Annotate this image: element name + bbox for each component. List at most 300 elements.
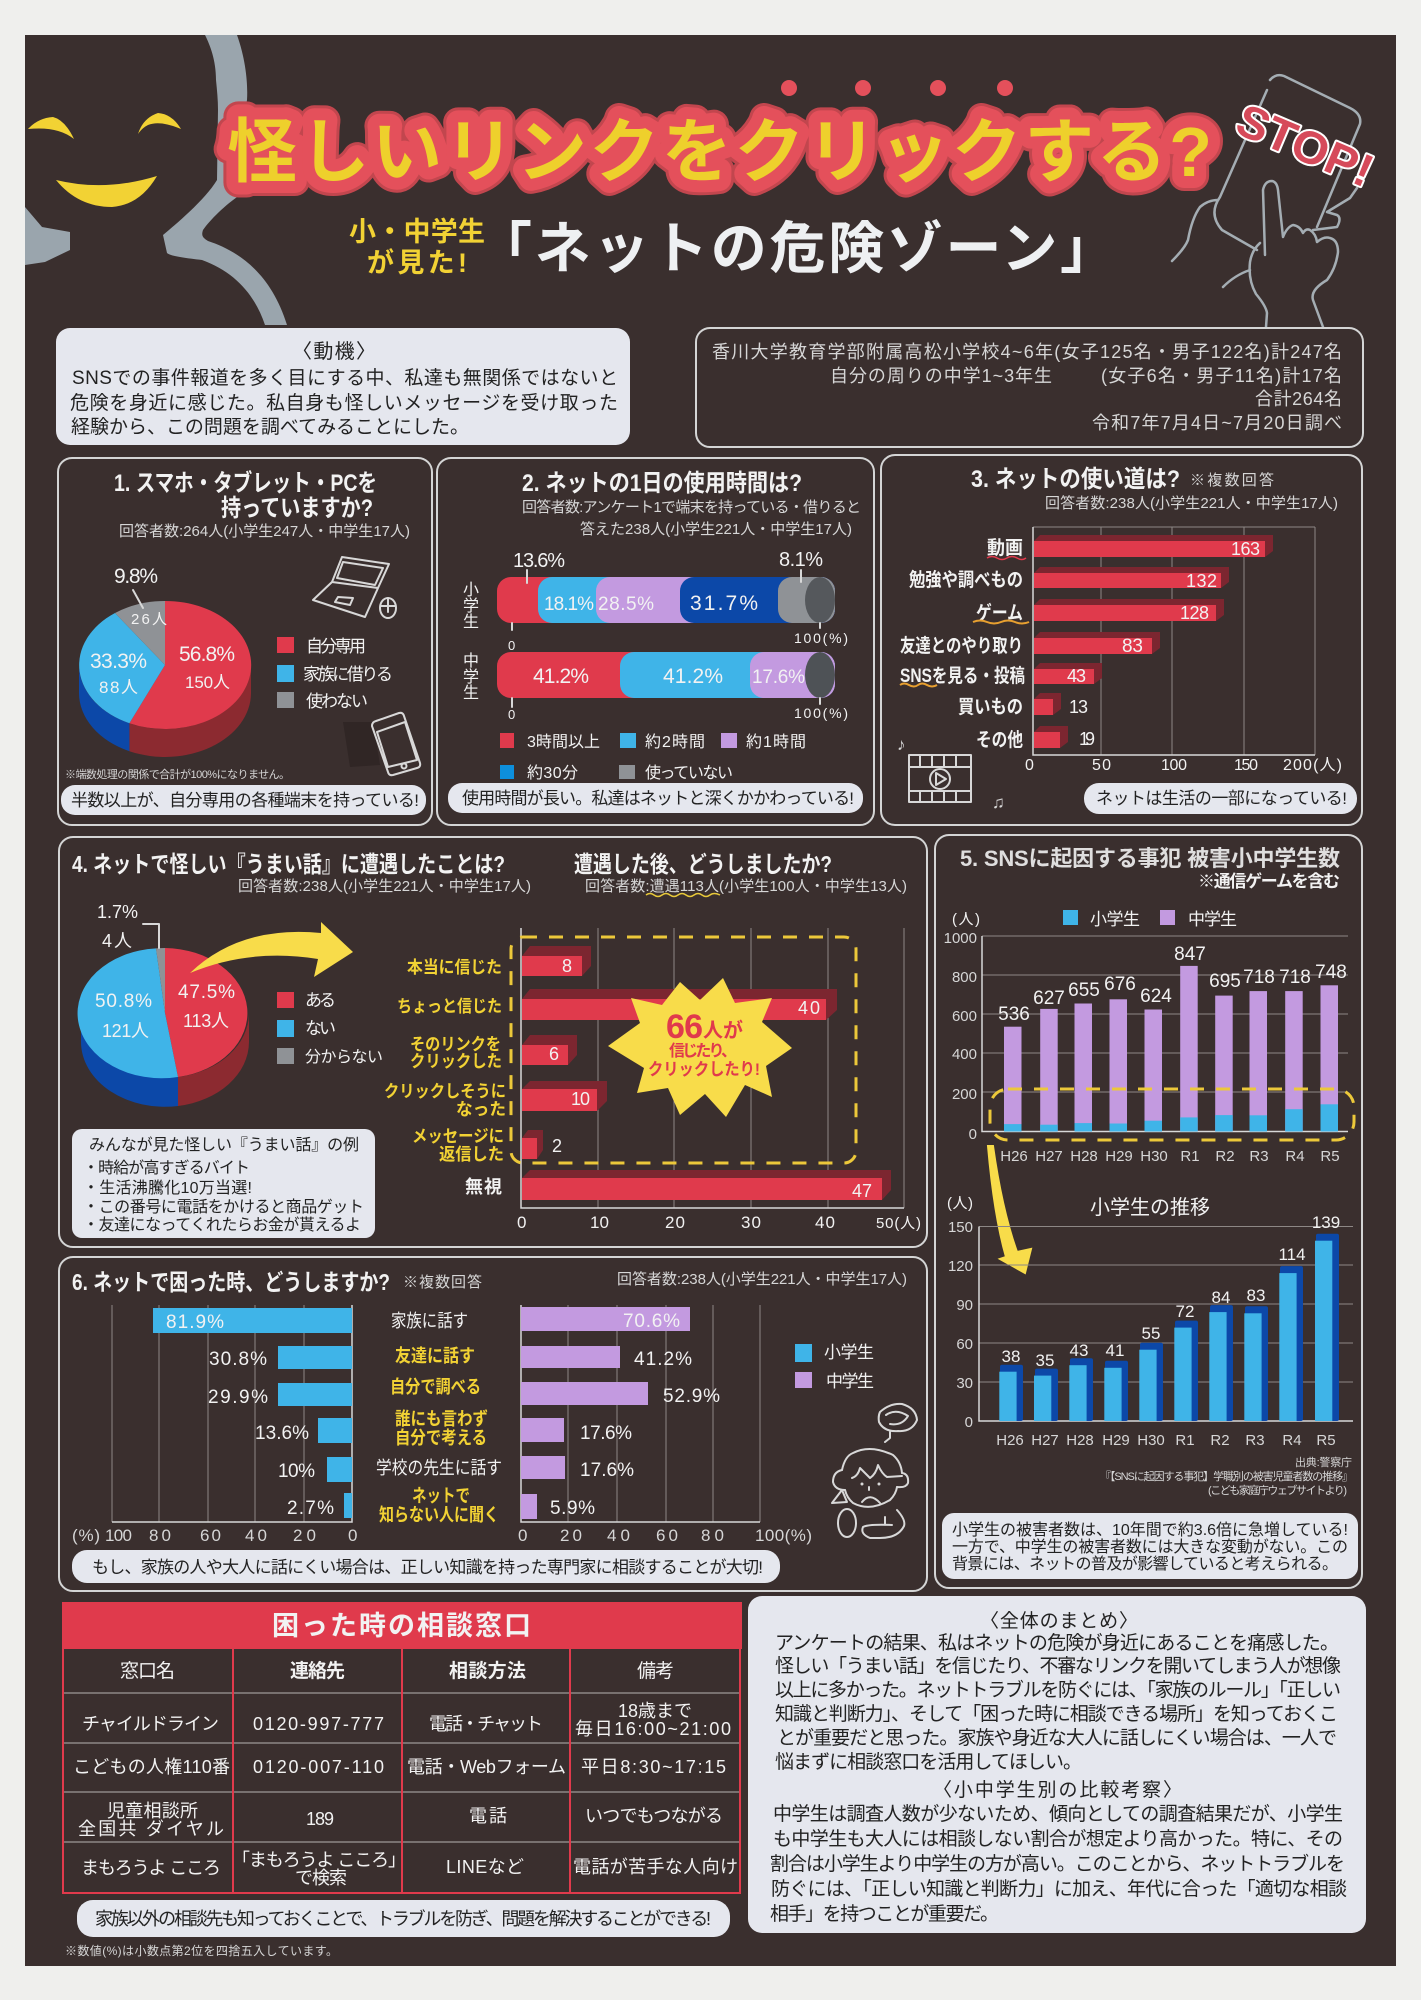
stacked bar: junior high: 41.2% <box>663 665 723 688</box>
stacked bar: junior high: 17.6% <box>752 667 805 688</box>
diverging bar chart: elementary <box>72 1305 357 1545</box>
heading 6 <box>72 1269 907 1295</box>
category labels: 家族に話す <box>391 1311 468 1331</box>
table rows: 電話が苦手な人向け <box>573 1857 738 1877</box>
starburst callout: 66 people: 信じたり、 <box>669 1041 737 1060</box>
callout 1 <box>61 785 426 815</box>
stacked bar: elementary: 28.5% <box>598 594 654 615</box>
diverging bar chart: junior high: 70.6% <box>623 1311 680 1332</box>
bar chart: actions after encounter: 0 <box>517 1213 526 1232</box>
stacked bar: elementary: 小 <box>463 581 479 599</box>
bar chart: uses: 43 <box>1067 666 1086 686</box>
bar chart: actions after encounter: 無視 <box>465 1177 502 1197</box>
bar chart: actions after encounter: クリックした <box>410 1052 502 1071</box>
pie chart: device ownership: 150人 <box>185 673 230 692</box>
legend: usage time <box>500 733 806 782</box>
pie chart: encountered: 1.7% <box>97 902 138 922</box>
table rows: こどもの人権110番 <box>73 1757 230 1777</box>
legend 6: 中学生 <box>826 1372 874 1391</box>
heading 2: 2. ネットの1日の使用時間は? <box>522 470 802 497</box>
heading 2 <box>522 470 861 538</box>
starburst callout: 66 people <box>608 978 792 1117</box>
stacked bar chart: victims total: H29 <box>1105 1148 1133 1165</box>
table rows: 電話・チャット <box>429 1714 543 1734</box>
table rows: LINEなど <box>446 1857 524 1877</box>
diverging bar chart: junior high: 20 <box>560 1526 582 1545</box>
panel: survey info <box>696 328 1363 447</box>
panel: motivation: 経験から、この問題を調べてみることにした。 <box>71 416 469 438</box>
table rows: 電話・Webフォーム <box>407 1757 566 1777</box>
panel: summary: 防ぐには、「正しい知識と判断力」に加え、年代に合った「適切な相談 <box>771 1878 1347 1900</box>
bar chart: actions after encounter: そのリンクを <box>410 1035 501 1054</box>
table rows: 児童相談所 <box>107 1801 198 1821</box>
pie chart: device ownership <box>79 565 251 757</box>
table: consultation contacts <box>62 1602 742 1893</box>
diverging bar chart: elementary: 2.7% <box>287 1498 334 1519</box>
callout 3 <box>1084 783 1357 814</box>
starburst callout: 66 people: 66 <box>666 1008 703 1046</box>
bar chart: elementary victims: 43 <box>1070 1341 1088 1360</box>
heading 1: 1. スマホ・タブレット・PCを <box>114 469 377 497</box>
subtitle: 小・中学生 <box>349 217 485 247</box>
diverging bar chart: junior high: 60 <box>656 1526 678 1545</box>
diverging bar chart: junior high: 40 <box>607 1526 630 1545</box>
table rows: 18歳まで <box>618 1701 692 1721</box>
bar chart: elementary victims: R1 <box>1175 1432 1195 1449</box>
stacked bar chart: victims total: 676 <box>1104 974 1136 995</box>
legend: encountered: ない <box>305 1019 336 1038</box>
stacked bar: elementary: 0 <box>508 638 515 653</box>
diverging bar chart: elementary: 13.6% <box>255 1423 309 1444</box>
stacked bar chart: victims total: 847 <box>1174 944 1206 965</box>
bar chart: uses: 13 <box>1069 697 1088 717</box>
bar chart: actions after encounter: 30 <box>741 1213 761 1232</box>
heading 1: 持っていますか? <box>221 495 373 522</box>
pie chart: device ownership: 9.8% <box>114 565 158 588</box>
arrow: yellow to bar chart <box>190 922 353 977</box>
panel: summary: も中学生も大人には相談しない割合が想定より高かった。特に、その <box>773 1828 1343 1850</box>
legend: usage time: 3時間以上 <box>527 733 600 751</box>
stacked bar: elementary: 18.1% <box>544 594 594 615</box>
box: examples of scams: ・友達になってくれたらお金が貰えるよ <box>83 1216 361 1234</box>
bar chart: elementary victims: H30 <box>1137 1432 1165 1449</box>
diverging bar chart: elementary: 100 <box>105 1526 132 1545</box>
callout: bottom message: 家族以外の相談先も知っておくことで、トラブルを防ぎ、問題を解決することができる! <box>95 1908 711 1929</box>
panel 5: SNS crime victims <box>935 835 1362 1588</box>
panel: summary: とが重要だと思った。家族や身近な大人に話しにくい場合は、一人で <box>777 1727 1337 1749</box>
panel: summary: 割合は小学生より中学生の方が高い。このことから、ネットトラブルを <box>770 1852 1345 1875</box>
bar chart: uses <box>900 527 1342 774</box>
panel: summary: 〈全体のまとめ〉 <box>980 1610 1138 1632</box>
stacked bar: elementary: 学 <box>463 597 479 615</box>
heading 3: 3. ネットの使い道は? <box>971 466 1180 493</box>
stacked bar chart: victims total: H30 <box>1140 1148 1168 1165</box>
stacked bar chart: victims total: 627 <box>1033 988 1065 1009</box>
starburst callout: 66 people: 人が <box>703 1018 743 1042</box>
stacked bar chart: victims total: 800 <box>952 969 977 986</box>
bar chart: actions after encounter: 本当に信じた <box>407 958 502 977</box>
bar chart: uses: SNSを見る・投稿 <box>900 665 1025 687</box>
bar chart: elementary victims: H26 <box>996 1432 1024 1449</box>
pie chart: device ownership: 26人 <box>131 611 167 628</box>
icon: hand pointing at smartphone <box>1172 75 1381 327</box>
bar chart: uses: 買いもの <box>958 697 1023 718</box>
panel: summary <box>748 1596 1366 1933</box>
callout 5: 背景には、ネットの普及が影響していると考えられる。 <box>952 1555 1338 1573</box>
table rows: いつでもつながる <box>585 1806 723 1826</box>
table header row <box>120 1659 674 1682</box>
panel 1: device ownership <box>58 458 432 825</box>
stacked bar chart: victims total: R3 <box>1249 1148 1269 1165</box>
heading 5 <box>960 846 1340 891</box>
pie chart: device ownership: 56.8% <box>179 643 235 666</box>
bar chart: elementary victims: 114 <box>1278 1245 1306 1264</box>
bar chart: uses: 友達とのやり取り <box>900 635 1023 657</box>
bar chart: uses: 50 <box>1092 757 1111 774</box>
legend: usage time: 約2時間 <box>645 733 705 751</box>
pie chart: encountered: 50.8% <box>95 991 152 1012</box>
title: 怪しいリンクをクリックする? <box>227 113 1212 191</box>
icon: video film: ♪ <box>897 735 906 754</box>
box: examples of scams: みんなが見た怪しい『うまい話』の例 <box>89 1136 359 1154</box>
table rows: 全国共 ダイヤル <box>78 1819 224 1839</box>
panel: survey info: 合計264名 <box>1255 389 1342 409</box>
panel: summary: 中学生は調査人数が少ないため、傾向としての調査結果だが、小学生 <box>773 1803 1343 1825</box>
bar chart: actions after encounter: 40 <box>798 998 820 1018</box>
diverging bar chart: junior high <box>518 1305 812 1545</box>
bar chart: actions after encounter: 10 <box>571 1089 590 1109</box>
diverging bar chart: junior high: 0 <box>518 1526 527 1545</box>
footnote: ※数値(%)は小数点第2位を四捨五入しています。 <box>65 1943 338 1958</box>
legend: ownership: 使わない <box>306 691 368 711</box>
legend 5: (人) <box>952 911 980 928</box>
bar chart: uses: 200(人) <box>1283 757 1342 774</box>
heading 6: 6. ネットで困った時、どうしますか? <box>72 1269 390 1295</box>
stacked bar chart: victims total: 536 <box>998 1004 1030 1025</box>
legend 5: 中学生 <box>1188 910 1237 929</box>
heading 5: ※通信ゲームを含む <box>1198 872 1340 891</box>
bar chart: actions after encounter: なった <box>456 1100 506 1119</box>
stacked bar chart: victims total: 200 <box>952 1086 977 1103</box>
bar chart: elementary victims: 小学生の推移 <box>1090 1196 1210 1219</box>
table rows: 189 <box>306 1809 334 1829</box>
box: examples of scams <box>72 1129 375 1238</box>
diverging bar chart: elementary: 0 <box>348 1526 357 1545</box>
stacked bar: junior high: 100(%) <box>794 705 848 721</box>
category labels <box>376 1311 502 1525</box>
bar chart: uses: その他 <box>976 729 1023 751</box>
bar chart: actions after encounter: 40 <box>815 1213 835 1232</box>
bar chart: elementary victims: R3 <box>1245 1432 1265 1449</box>
diverging bar chart: junior high: 17.6% <box>580 1423 632 1444</box>
table rows: まもろうよ こころ <box>81 1858 221 1878</box>
bar chart: elementary victims: 120 <box>948 1258 973 1275</box>
diverging bar chart: elementary: 40 <box>245 1526 267 1545</box>
table heading <box>62 1602 742 1649</box>
stacked bar: elementary: 8.1% <box>779 549 823 571</box>
panel 3: internet uses <box>881 455 1362 825</box>
box: examples of scams: ・時給が高すぎるバイト <box>83 1159 250 1177</box>
bar chart: elementary victims: 90 <box>956 1297 973 1314</box>
pie chart: device ownership: 33.3% <box>90 650 147 673</box>
stacked bar: elementary: 100(%) <box>794 630 848 646</box>
bar chart: uses: 128 <box>1180 603 1209 623</box>
diverging bar chart: elementary: 81.9% <box>166 1312 224 1333</box>
legend: ownership <box>277 637 393 711</box>
bar chart: actions after encounter: 返信した <box>439 1145 504 1164</box>
diverging bar chart: elementary: 20 <box>293 1526 316 1545</box>
table rows: 平日8:30~17:15 <box>581 1757 726 1777</box>
heading 4 left <box>72 851 531 895</box>
bar chart: actions after encounter: 10 <box>590 1213 609 1232</box>
table rows: 電話 <box>469 1806 507 1826</box>
callout 5: 一方で、中学生の被害者数には大きな変動がない。この <box>952 1538 1348 1556</box>
bar chart: elementary victims: (人) <box>947 1195 973 1212</box>
stacked bar chart: victims total: 718 <box>1243 967 1275 988</box>
diverging bar chart: junior high: 41.2% <box>634 1349 692 1370</box>
subtitle: が見た! <box>367 247 467 278</box>
stacked bar chart: victims total: 655 <box>1068 980 1100 1001</box>
legend: usage time: 約30分 <box>527 764 578 782</box>
stacked bar chart: victims total: 600 <box>952 1008 977 1025</box>
stacked bar: junior high <box>463 652 848 722</box>
category labels: 自分で考える <box>395 1428 487 1448</box>
bar chart: uses: 150 <box>1234 757 1258 774</box>
bar chart: actions after encounter: クリックしそうに <box>384 1082 506 1101</box>
stacked bar: junior high: 生 <box>463 684 479 702</box>
stacked bar chart: victims total <box>944 930 1354 1165</box>
panel: survey info: 自分の周りの中学1~3年生 <box>830 366 1052 386</box>
panel: summary: アンケートの結果、私はネットの危険が身近にあることを痛感した。 <box>775 1632 1339 1654</box>
pie chart: encountered: 121人 <box>102 1021 149 1041</box>
table heading: 困った時の相談窓口 <box>272 1611 531 1641</box>
heading 3: 回答者数:238人(小学生221人・中学生17人) <box>1045 495 1338 512</box>
bar chart: actions after encounter: 2 <box>552 1136 562 1156</box>
panel 6: when in trouble <box>59 1257 927 1591</box>
legend 5: 小学生 <box>1090 910 1140 929</box>
bar chart: elementary victims: 60 <box>956 1336 973 1353</box>
icon: video film <box>897 735 1005 812</box>
source note: 『【SNSに起因する事犯】学職別の被害児童者数の推移』 <box>1100 1469 1353 1483</box>
bar chart: actions after encounter: 50(人) <box>876 1215 921 1232</box>
bar chart: elementary victims: 84 <box>1212 1288 1230 1307</box>
legend: ownership: 自分専用 <box>306 637 366 656</box>
stacked bar chart: victims total: 0 <box>969 1126 977 1143</box>
stacked bar chart: victims total: R4 <box>1285 1148 1305 1165</box>
panel: motivation: SNSでの事件報道を多く目にする中、私達も無関係ではないと <box>72 367 618 389</box>
title: 怪しいリンクをクリックする? <box>227 113 1212 191</box>
icon: video film: ♫ <box>992 793 1005 812</box>
bar chart: uses: 勉強や調べもの <box>909 569 1023 591</box>
bar chart: uses: 19 <box>1079 729 1095 749</box>
bar chart: elementary victims: 30 <box>956 1375 973 1392</box>
callout 2: 使用時間が長い。私達はネットと深くかかわっている! <box>462 788 854 808</box>
callout 2 <box>448 783 863 813</box>
diverging bar chart: elementary: 30.8% <box>209 1349 267 1370</box>
table rows: チャイルドライン <box>82 1714 219 1734</box>
bar chart: uses: 83 <box>1122 636 1143 657</box>
stacked bar chart: victims total: 748 <box>1315 962 1347 983</box>
stacked bar chart: victims total: 695 <box>1209 971 1241 992</box>
heading 2: 回答者数:アンケート1で端末を持っている・借りると <box>522 499 861 516</box>
legend: encountered: ある <box>305 991 336 1010</box>
panel 2: daily usage <box>437 458 874 825</box>
callout 6 <box>72 1550 780 1583</box>
stacked bar chart: victims total: H26 <box>1000 1148 1028 1165</box>
heading 6: ※複数回答 <box>403 1274 482 1291</box>
starburst callout: 66 people: クリックしたり! <box>648 1060 760 1079</box>
callout 1: 半数以上が、自分専用の各種端末を持っている! <box>71 791 419 810</box>
callout 3: ネットは生活の一部になっている! <box>1096 789 1347 808</box>
bar chart: elementary victims: R5 <box>1316 1432 1336 1449</box>
source note <box>1100 1455 1353 1497</box>
diverging bar chart: junior high: 5.9% <box>550 1498 595 1519</box>
heading 6: 回答者数:238人(小学生221人・中学生17人) <box>617 1271 907 1288</box>
stacked bar: junior high: 学 <box>463 668 479 686</box>
bar chart: elementary victims: H29 <box>1102 1432 1130 1449</box>
stacked bar chart: victims total: 1000 <box>944 930 977 947</box>
pie chart: encountered: 113人 <box>183 1011 229 1031</box>
category labels: 誰にも言わず <box>395 1409 488 1429</box>
source note: (こども家庭庁ウェブサイトより) <box>1208 1483 1347 1497</box>
diverging bar chart: junior high: 17.6% <box>580 1460 634 1481</box>
category labels: 自分で調べる <box>390 1377 481 1397</box>
bar chart: elementary victims: 83 <box>1247 1286 1265 1305</box>
category labels: 知らない人に聞く <box>379 1505 499 1525</box>
legend: ownership: 家族に借りる <box>303 665 393 684</box>
panel: summary: 相手」を持つことが重要だ。 <box>770 1903 999 1925</box>
stacked bar chart: victims total: R1 <box>1180 1148 1200 1165</box>
bar chart: elementary victims: 41 <box>1106 1341 1124 1360</box>
pie chart: device ownership: 88人 <box>99 678 138 697</box>
title: 怪しいリンクをクリックする? <box>227 113 1212 191</box>
icon: smartphone <box>343 713 420 775</box>
heading 4 left: 回答者数:238人(小学生221人・中学生17人) <box>238 878 531 895</box>
diverging bar chart: elementary: 10% <box>278 1461 315 1482</box>
stacked bar chart: victims total: 624 <box>1140 986 1172 1007</box>
subtitle: 「ネットの危険ゾーン」 <box>476 217 1116 280</box>
legend: encountered: 分からない <box>305 1048 383 1066</box>
bar chart: uses: 100 <box>1161 757 1187 774</box>
bar chart: actions after encounter: メッセージに <box>412 1127 504 1146</box>
panel: survey info: 令和7年7月4日~7月20日調べ <box>1092 413 1342 433</box>
heading 4 left: 4. ネットで怪しい『うまい話』に遭遇したことは? <box>72 851 505 877</box>
table rows: で検索 <box>295 1868 347 1888</box>
category labels: 友達に話す <box>395 1346 475 1366</box>
icon: hand pointing at smartphone: STOP! <box>1229 93 1381 197</box>
table rows: 「まもろうよ こころ」 <box>232 1850 406 1870</box>
heading 5: 5. SNSに起因する事犯 被害小中学生数 <box>960 846 1340 871</box>
callout: bottom message <box>77 1900 730 1937</box>
stacked bar: junior high: 41.2% <box>533 665 589 688</box>
pie chart: encountered <box>78 902 249 1107</box>
stacked bar: junior high: 中 <box>463 652 479 670</box>
bar chart: elementary victims: 139 <box>1312 1213 1340 1232</box>
legend 6: 小学生 <box>824 1343 874 1362</box>
panel: survey info: (女子6名・男子11名)計17名 <box>1101 366 1342 386</box>
diverging bar chart: elementary: 60 <box>200 1526 221 1545</box>
stacked bar: junior high: 0 <box>508 707 515 722</box>
bar chart: elementary victims: 55 <box>1142 1324 1160 1343</box>
diverging bar chart: junior high: 52.9% <box>663 1386 720 1407</box>
stacked bar: elementary: 生 <box>463 613 479 631</box>
panel: motivation: 危険を身近に感じた。私自身も怪しいメッセージを受け取った <box>70 392 618 414</box>
category labels: 学校の先生に話す <box>376 1458 502 1478</box>
panel: summary: 悩まずに相談窓口を活用してほしい。 <box>775 1751 1082 1773</box>
pie chart: encountered: 47.5% <box>178 982 235 1003</box>
stacked bar chart: victims total: R2 <box>1215 1148 1235 1165</box>
box: examples of scams: ・生活沸騰化10万当選! <box>83 1179 252 1197</box>
legend 6 <box>795 1343 874 1391</box>
stacked bar chart: victims total: 718 <box>1279 967 1311 988</box>
callout 5 <box>942 1513 1358 1579</box>
bar chart: uses: 132 <box>1186 571 1217 591</box>
icon: laptop and mouse <box>313 557 396 618</box>
bar chart: actions after encounter: 47 <box>852 1181 872 1201</box>
heading 4 right: 遭遇した後、どうしましたか? <box>574 851 832 877</box>
bar chart: elementary victims: 38 <box>1002 1347 1020 1366</box>
bar chart: elementary victims: 0 <box>965 1414 973 1431</box>
bar chart: actions after encounter: 20 <box>665 1213 685 1232</box>
panel: summary: 知識と判断力」、そして「困った時に相談できる場所」を知っておくこ <box>775 1703 1338 1725</box>
legend 5 <box>952 910 1237 929</box>
bar chart: uses: 動画 <box>987 537 1023 559</box>
stacked bar chart: victims total: R5 <box>1320 1148 1340 1165</box>
legend: usage time: 使っていない <box>645 764 733 782</box>
diverging bar chart: elementary: 29.9% <box>208 1387 268 1408</box>
panel: motivation <box>56 328 630 445</box>
table header row: 備考 <box>637 1660 674 1682</box>
box: examples of scams: ・この番号に電話をかけると商品ゲット <box>83 1198 364 1216</box>
heading 1 <box>114 469 410 540</box>
table rows: 0120-997-777 <box>253 1714 384 1734</box>
stacked bar chart: victims total: H28 <box>1070 1148 1098 1165</box>
bar chart: elementary victims: R4 <box>1282 1432 1302 1449</box>
legend: usage time: 約1時間 <box>746 733 806 751</box>
bar chart: uses: 0 <box>1025 757 1034 774</box>
bar chart: elementary victims: H27 <box>1031 1432 1059 1449</box>
panel: motivation: 〈動機〉 <box>292 340 376 363</box>
bar chart: elementary victims <box>947 1195 1353 1449</box>
bar chart: actions after encounter: 8 <box>562 956 572 976</box>
bar chart: uses: 163 <box>1231 539 1260 559</box>
pie chart: encountered: 4人 <box>102 931 132 951</box>
heading 4 right <box>574 851 907 896</box>
heading 3: ※複数回答 <box>1190 472 1274 489</box>
panel: summary: 〈小中学生別の比較考察〉 <box>933 1779 1182 1801</box>
bar chart: actions after encounter: 6 <box>549 1044 559 1064</box>
callout 6: もし、家族の人や大人に話にくい場合は、正しい知識を持った専門家に相談することが大切! <box>92 1558 763 1577</box>
icon: worried child <box>832 1404 917 1538</box>
panel: survey info: 香川大学教育学部附属高松小学校4~6年(女子125名・男子122名)計247名 <box>712 342 1342 362</box>
category labels: ネットで <box>412 1486 470 1506</box>
panel: summary: 以上に多かった。ネットトラブルを防ぐには、「家族のルール」「正しい <box>775 1678 1341 1701</box>
table header row: 窓口名 <box>120 1660 175 1682</box>
table header row: 連絡先 <box>290 1660 345 1682</box>
illustration: smiling shadow figure <box>25 35 287 325</box>
table rows: 毎日16:00~21:00 <box>575 1719 731 1739</box>
stacked bar: elementary <box>463 549 848 653</box>
heading 1: 回答者数:264人(小学生247人・中学生17人) <box>119 523 410 540</box>
stacked bar chart: victims total: 400 <box>952 1046 977 1063</box>
stacked bar: elementary: 13.6% <box>513 550 565 572</box>
table header row: 相談方法 <box>449 1659 526 1682</box>
stacked bar: elementary: 31.7% <box>690 592 758 615</box>
heading 2: 答えた238人(小学生221人・中学生17人) <box>580 521 852 538</box>
callout 5: 小学生の被害者数は、10年間で約3.6倍に急増している! <box>952 1520 1348 1539</box>
diverging bar chart: elementary: 80 <box>149 1526 171 1545</box>
bar chart: elementary victims: 35 <box>1036 1351 1054 1370</box>
